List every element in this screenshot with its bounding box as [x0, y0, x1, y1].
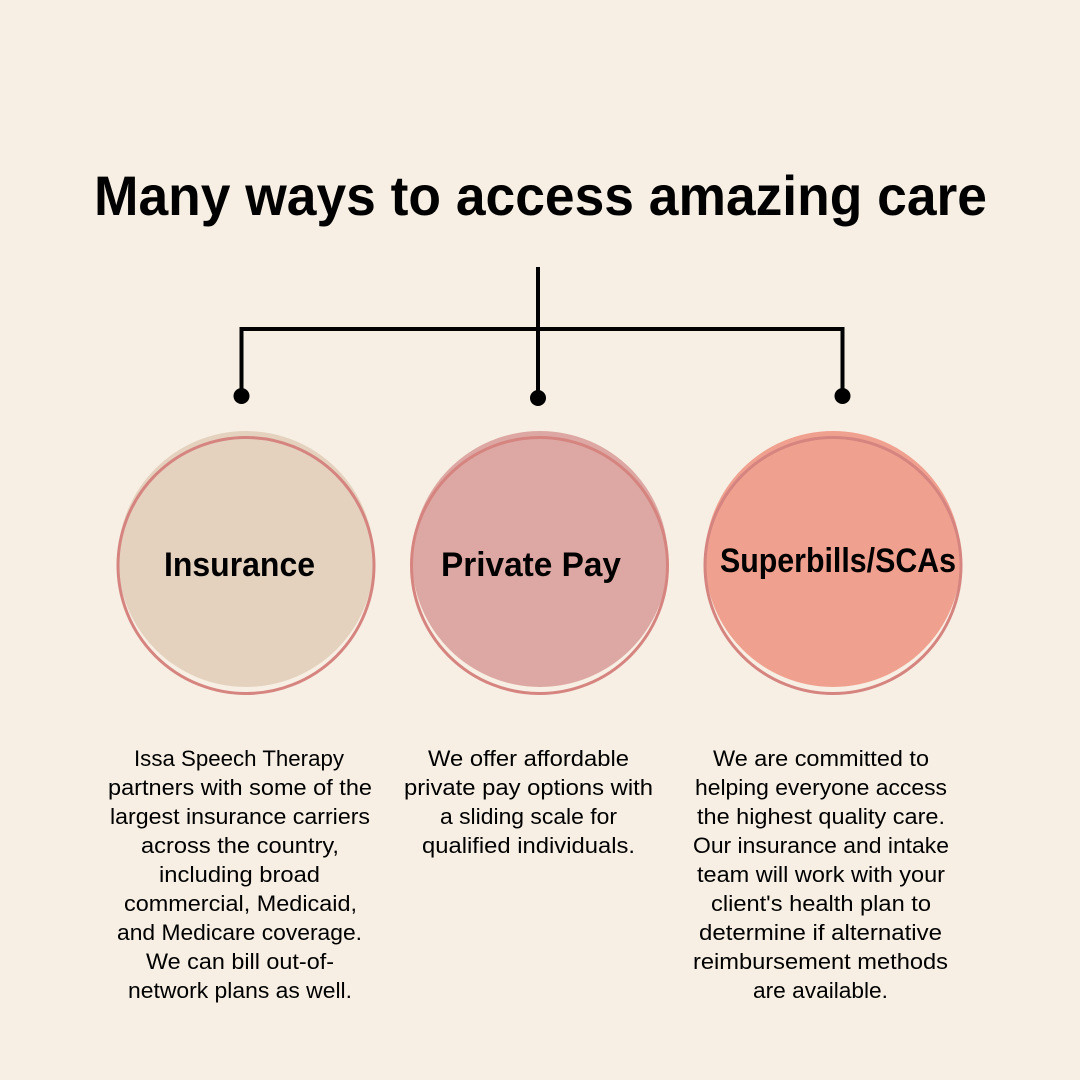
panel: superbills and SCAs	[693, 431, 961, 1003]
text block: private pay	[404, 746, 653, 858]
circle: superbills and SCAs	[705, 431, 961, 694]
title: Many ways to access amazing care	[94, 164, 987, 227]
text block: superbills and SCAs: helping everyone access	[695, 775, 947, 800]
text block: insurance: Issa Speech Therapy	[134, 746, 344, 771]
text block: insurance	[108, 746, 372, 1003]
text block: superbills and SCAs: are available.	[753, 978, 888, 1003]
text block: insurance: partners with some of the	[108, 775, 372, 800]
text block: insurance: including broad	[159, 862, 320, 887]
connector tree	[234, 267, 850, 406]
text block: superbills and SCAs: We are committed to	[713, 746, 929, 771]
text block: insurance: across the country,	[141, 833, 339, 858]
text block: superbills and SCAs: client's health plan to	[711, 891, 931, 916]
heading: insurance: Insurance	[164, 546, 315, 584]
text block: private pay: a sliding scale for	[440, 804, 617, 829]
text block: private pay: private pay options with	[404, 775, 653, 800]
panel: private pay	[404, 431, 668, 858]
circle: private pay	[412, 431, 668, 694]
text block: insurance: commercial, Medicaid,	[124, 891, 357, 916]
text block: insurance: largest insurance carriers	[110, 804, 370, 829]
text block: private pay: qualified individuals.	[422, 833, 635, 858]
text block: private pay: We offer affordable	[428, 746, 629, 771]
text block: insurance: and Medicare coverage.	[117, 920, 362, 945]
text block: superbills and SCAs: reimbursement methods	[693, 949, 948, 974]
text block: insurance: We can bill out-of-	[146, 949, 334, 974]
text block: superbills and SCAs: the highest quality care.	[697, 804, 945, 829]
text block: superbills and SCAs	[693, 746, 949, 1003]
heading: private pay: Private Pay	[441, 546, 621, 584]
circle: insurance	[118, 431, 374, 694]
text block: superbills and SCAs: Our insurance and intake	[693, 833, 949, 858]
text block: superbills and SCAs: team will work with your	[697, 862, 945, 887]
heading: superbills and SCAs: Superbills/SCAs	[720, 542, 956, 580]
text block: superbills and SCAs: determine if alternative	[699, 920, 942, 945]
panel: insurance	[108, 431, 374, 1003]
text block: insurance: network plans as well.	[128, 978, 352, 1003]
